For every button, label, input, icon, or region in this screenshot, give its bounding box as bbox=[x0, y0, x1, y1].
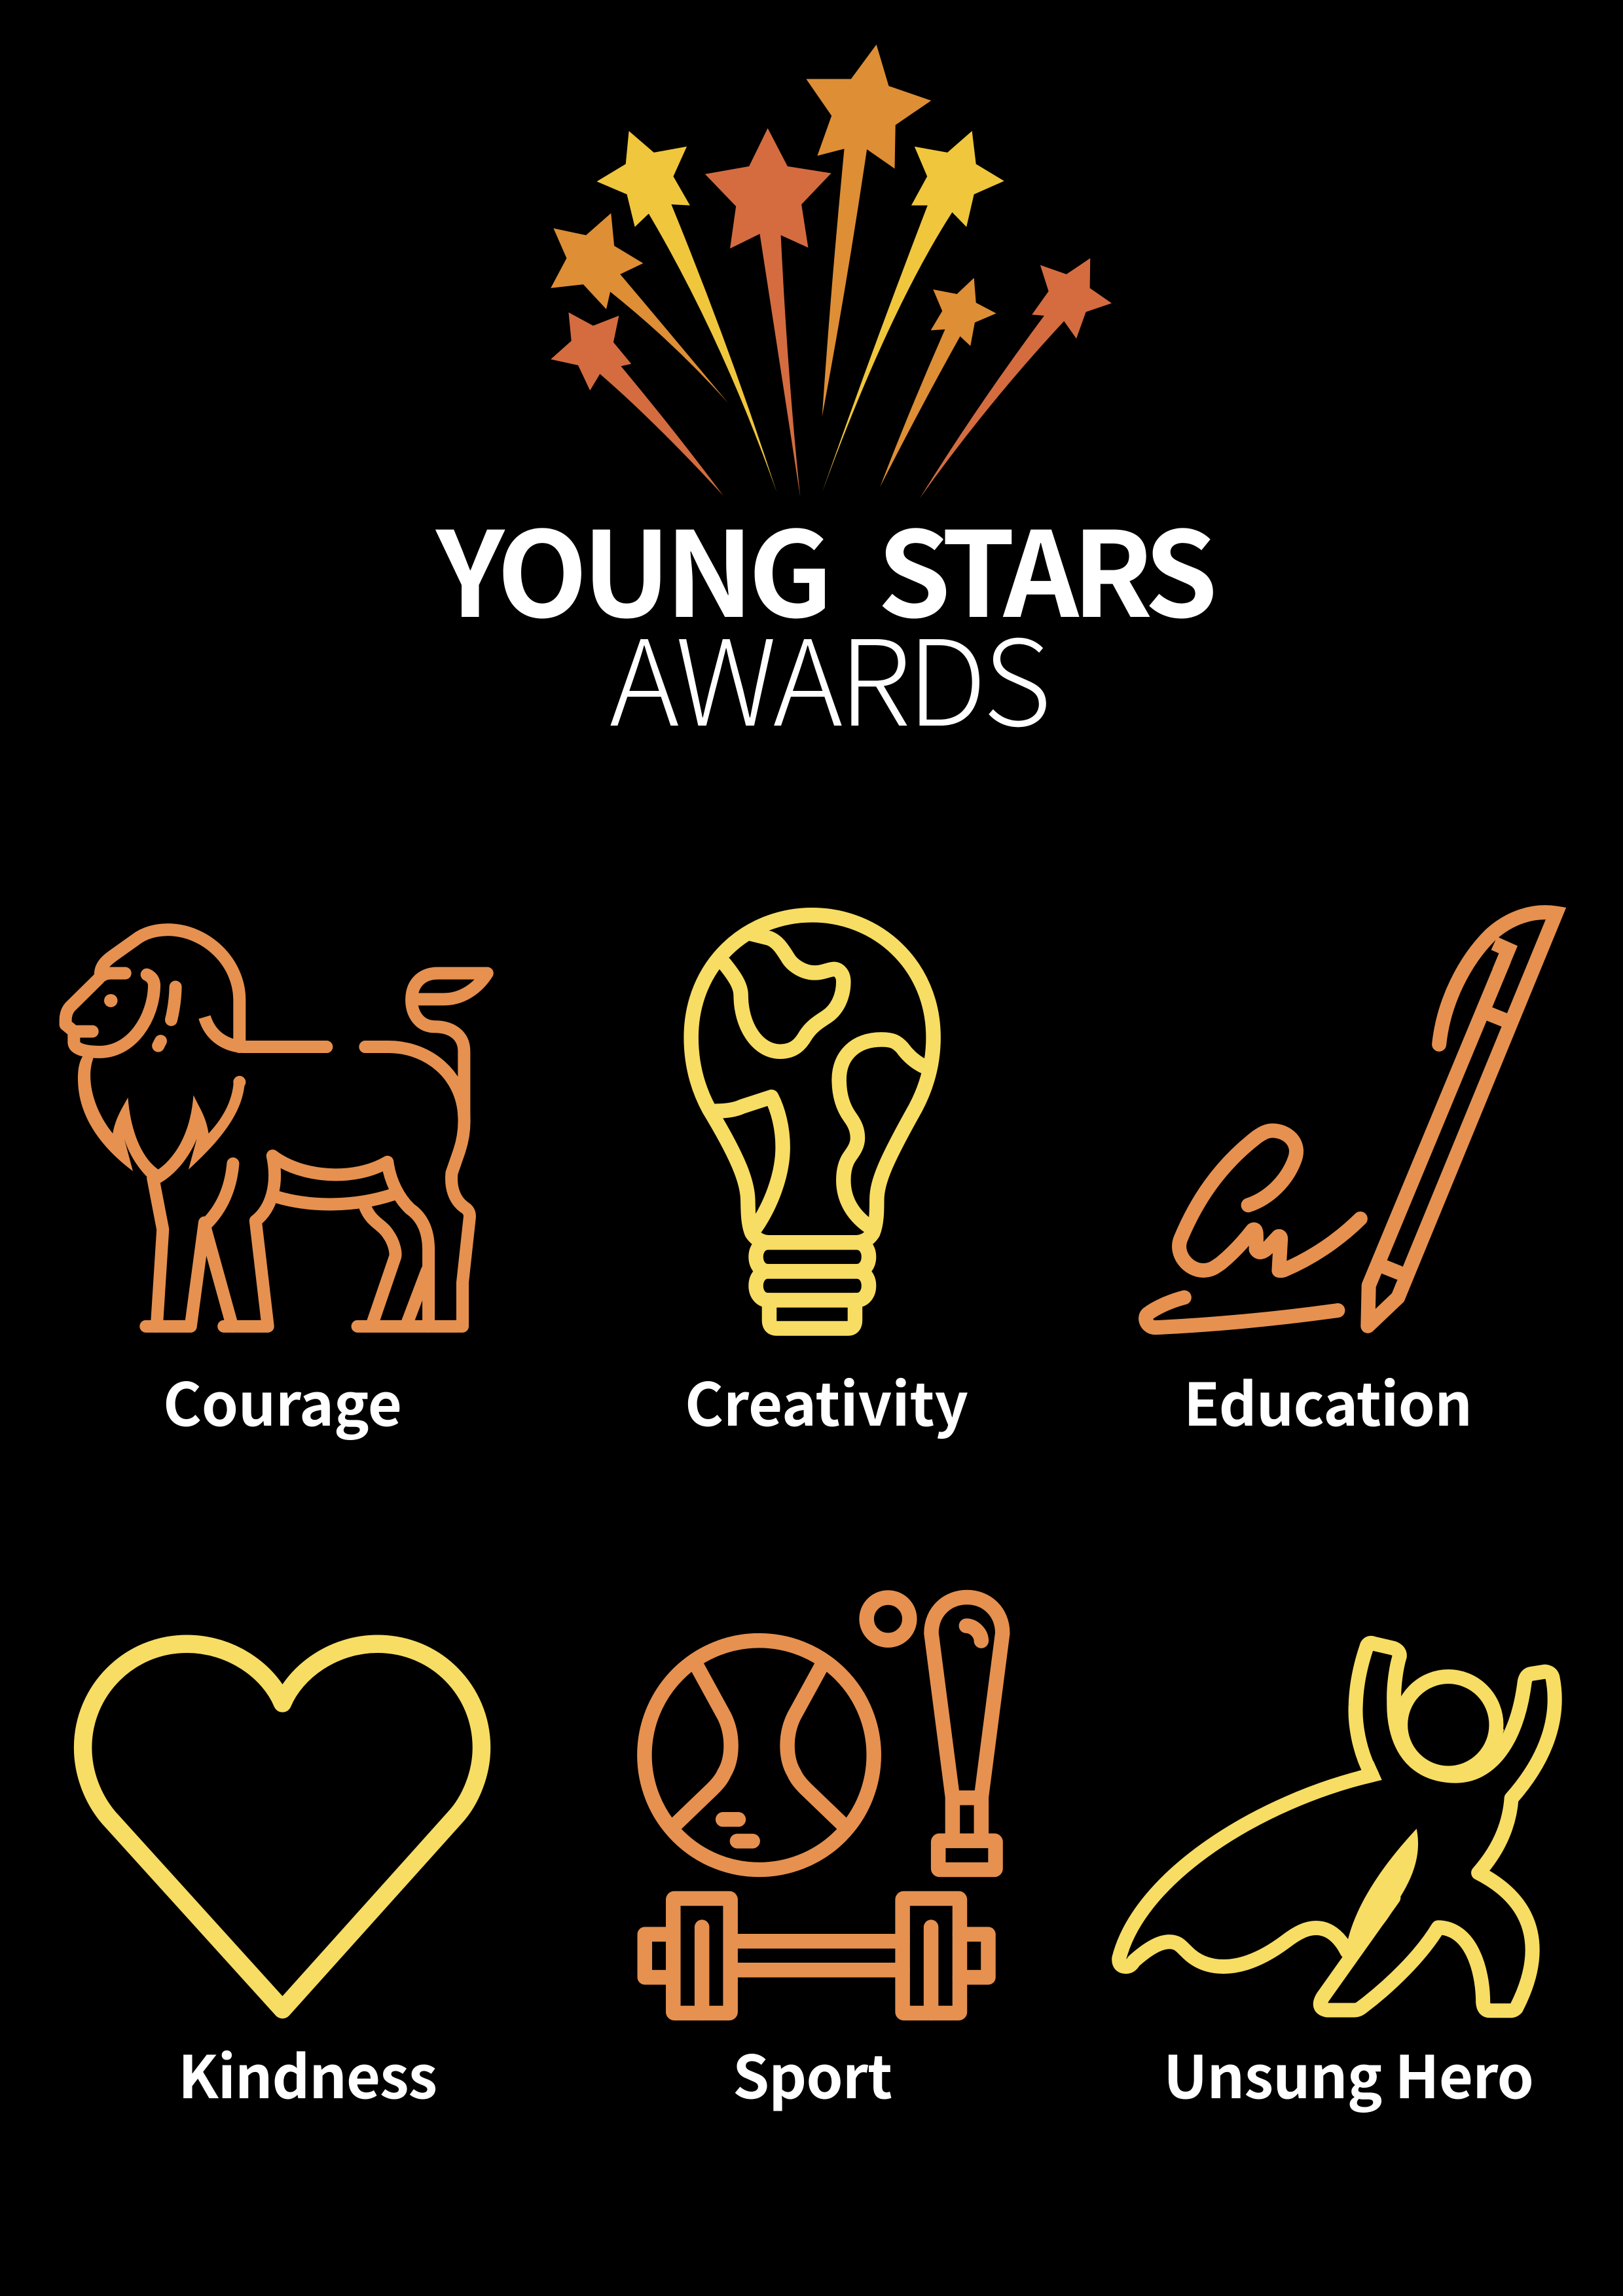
star: top orange bbox=[806, 45, 931, 417]
star: lower-left red bbox=[551, 312, 723, 496]
star: centre red bbox=[705, 128, 831, 497]
star: far right red bbox=[920, 258, 1112, 498]
star: left orange bbox=[551, 213, 728, 403]
star: small right orange bbox=[880, 278, 996, 487]
icon: pen and signature bbox=[1146, 912, 1556, 1327]
title: Young Stars bbox=[435, 480, 1218, 651]
label: Education: Education bbox=[1184, 1358, 1472, 1443]
icon: light bulb globe bbox=[691, 915, 934, 1329]
title: Young Stars: YOUNG bbox=[435, 480, 833, 651]
label: Unsung Hero: Unsung Hero bbox=[1163, 2030, 1534, 2115]
label: Courage: Courage bbox=[163, 1358, 402, 1443]
label: Creativity: Creativity bbox=[685, 1358, 968, 1443]
star: right yellow bbox=[822, 131, 1004, 492]
icon: heart bbox=[83, 1644, 481, 2010]
label: Kindness: Kindness bbox=[178, 2030, 437, 2115]
label: Sport: Sport bbox=[733, 2030, 892, 2115]
subtitle: Awards: AWARDS bbox=[610, 589, 1051, 760]
star: left yellow bbox=[596, 131, 777, 492]
icon: caped hero bbox=[1119, 1643, 1555, 2010]
icon: lion bbox=[65, 930, 487, 1326]
logo: shooting stars bbox=[551, 45, 1112, 498]
title: Young Stars: STARS bbox=[877, 480, 1218, 651]
icon: sport equipment bbox=[644, 1597, 1002, 2013]
